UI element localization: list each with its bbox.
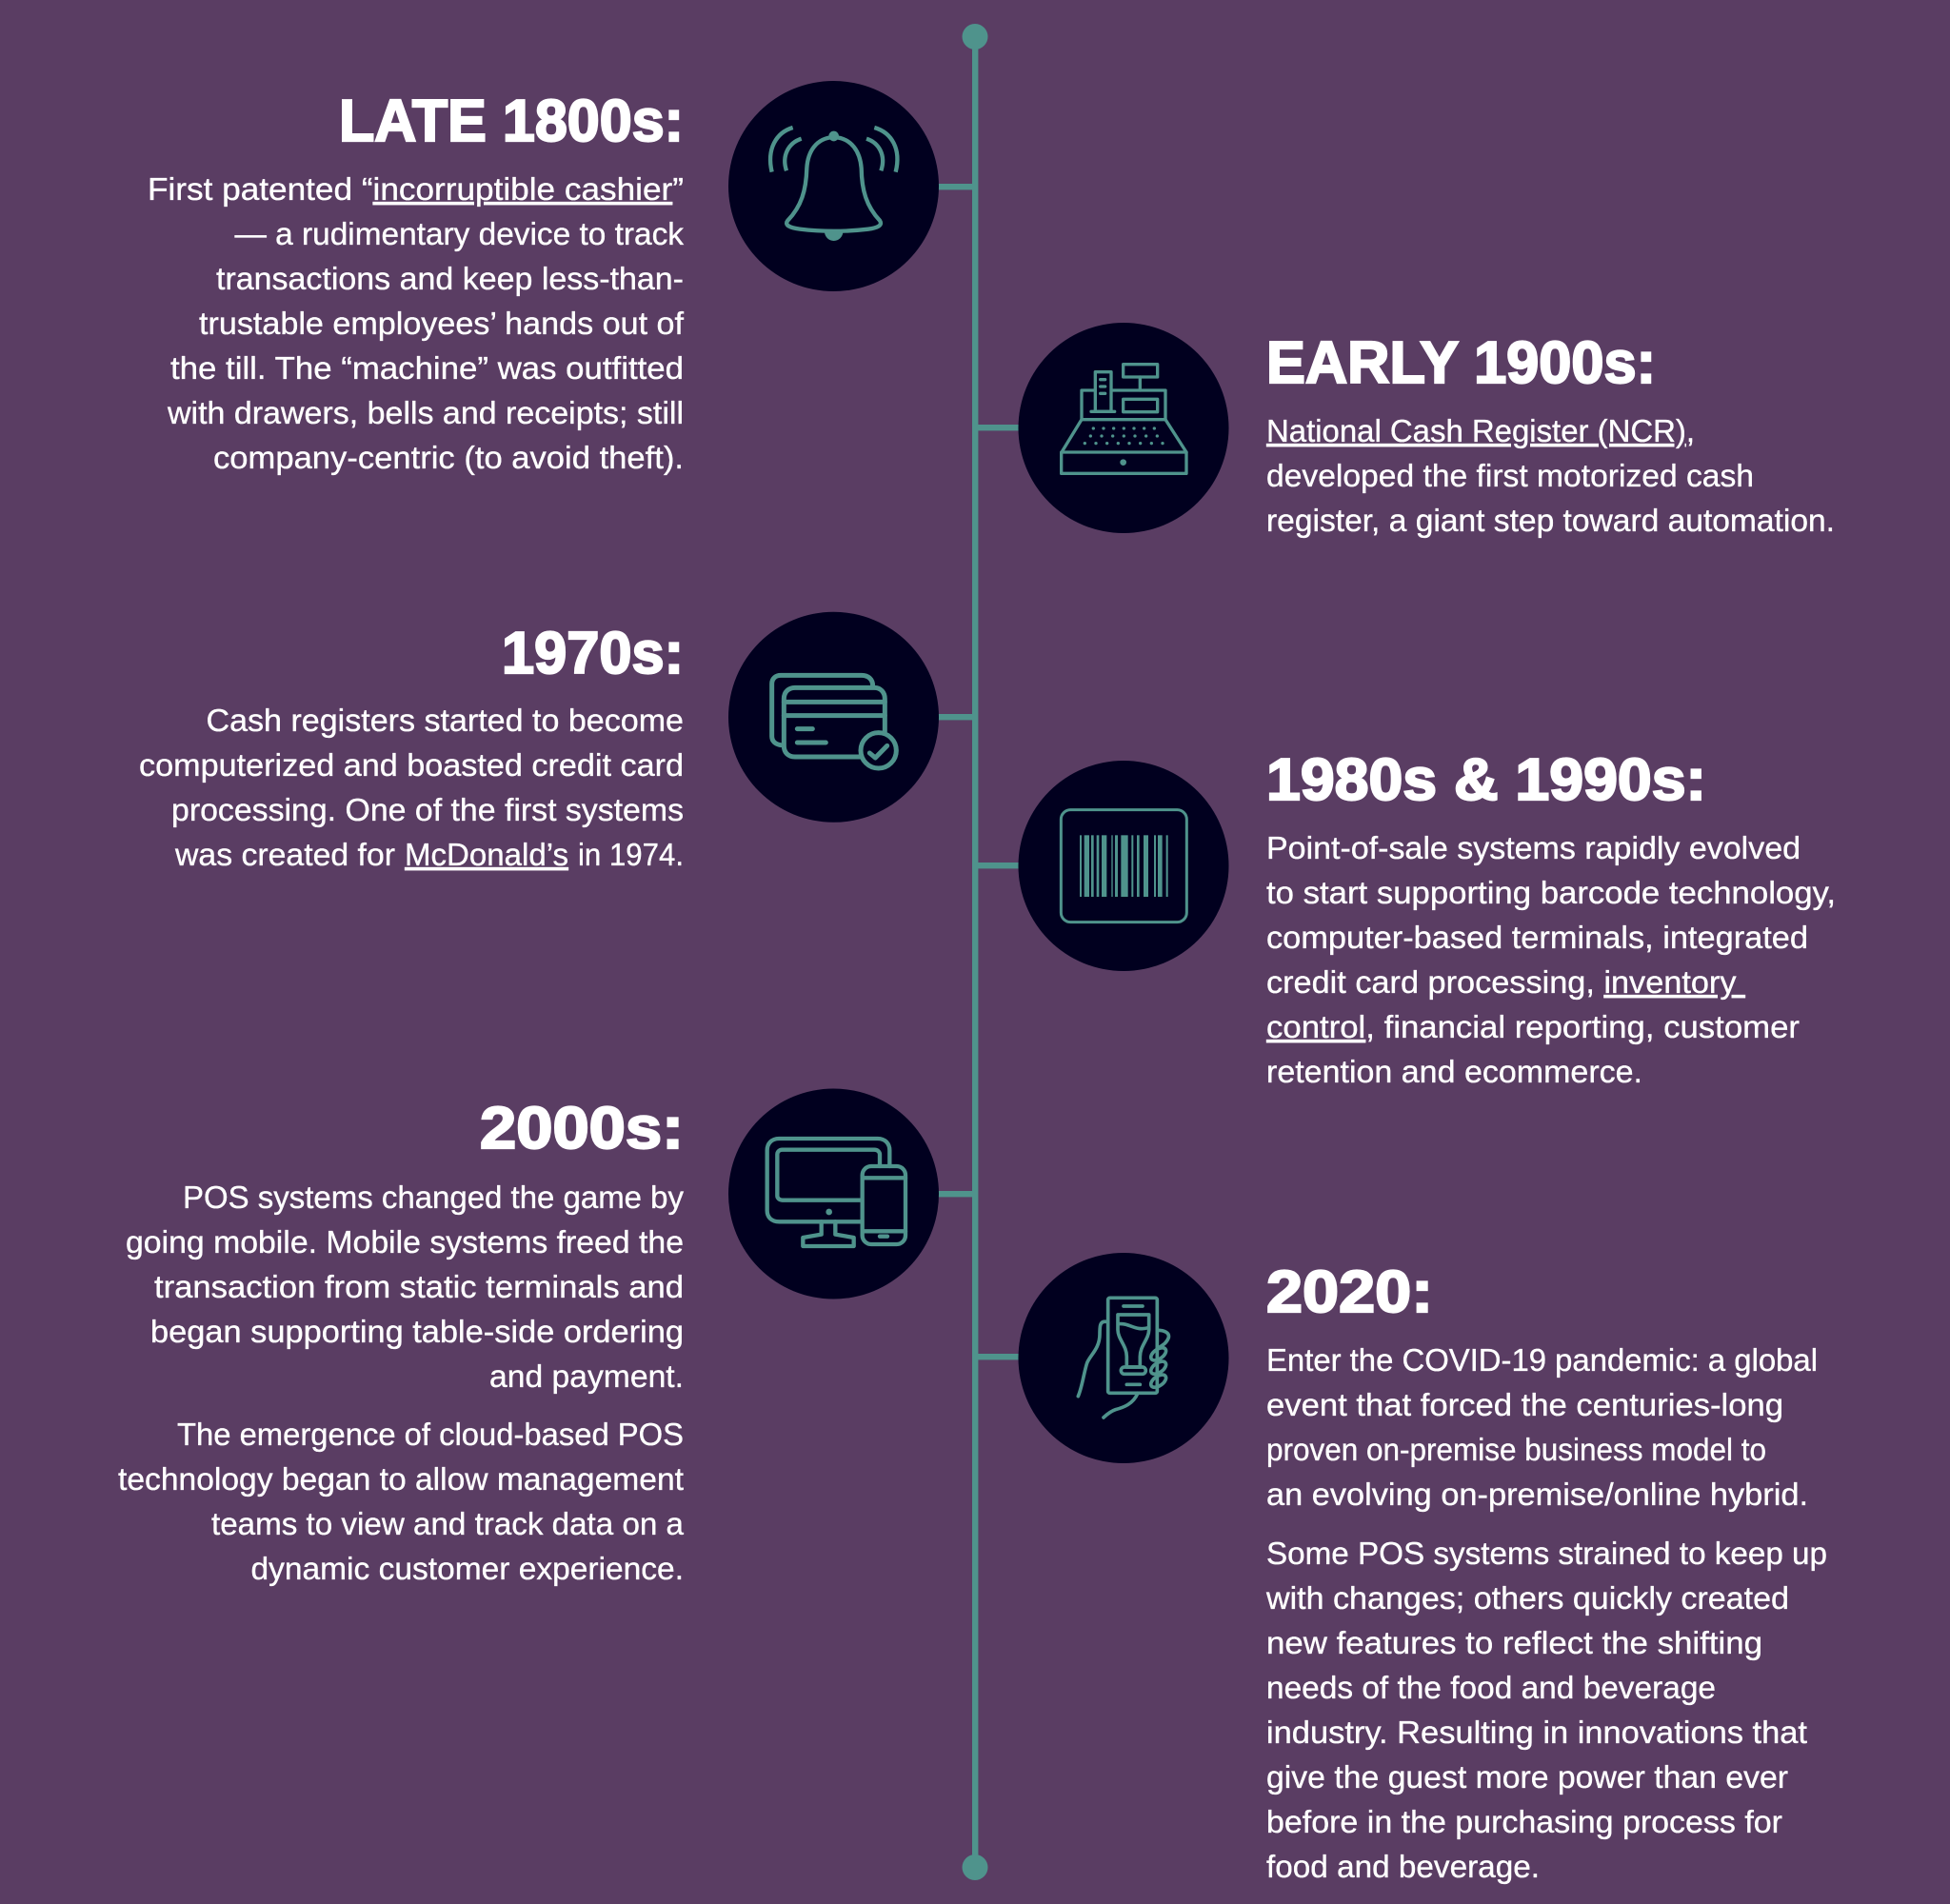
text: 1970s description: Cash registers started to become — [206, 703, 684, 738]
timeline spine — [962, 24, 988, 1880]
heading: 1970s: 1970s: — [502, 621, 684, 686]
text: 2000s description: dynamic customer experience. — [251, 1551, 684, 1586]
text: late 1800s description: with drawers, bells and receipts; still — [167, 395, 684, 430]
text: 1970s description: was created for — [174, 837, 395, 872]
text: 2000s description — [118, 1180, 685, 1586]
text: 1980s and 1990s description: to start supporting barcode technology, — [1266, 875, 1836, 910]
text: 1980s and 1990s description: credit card processing, inventory — [1266, 964, 1745, 1000]
heading: 2000s: 2000s: — [480, 1096, 684, 1161]
text: late 1800s description — [148, 171, 685, 475]
text: late 1800s description: First patented “ incorruptible cashier ” — [148, 171, 684, 207]
text: early 1900s description — [1266, 413, 1835, 538]
panel: 2000s — [118, 1096, 685, 1586]
text: 2020 description: an evolving on-premise/online hybrid. — [1266, 1477, 1808, 1512]
text: 2000s description: going mobile. Mobile systems freed the — [126, 1224, 684, 1259]
panel: late 1800s — [148, 89, 685, 475]
text: 2020 description: with changes; others quickly created — [1265, 1580, 1789, 1616]
panel: 2020 — [1265, 1259, 1827, 1884]
icon: bell — [728, 81, 939, 291]
text: 2020 description — [1265, 1342, 1827, 1884]
icon: barcode — [1019, 761, 1228, 971]
text: 2020 description: before in the purchasing process for — [1266, 1804, 1782, 1839]
text: 2000s description: POS systems changed the game by — [183, 1180, 684, 1215]
icon: cash register — [1019, 323, 1228, 533]
text: 1970s description: computerized and boasted credit card — [139, 747, 684, 783]
text: 2020 description: industry. Resulting in innovations that — [1266, 1715, 1807, 1750]
text: 2000s description: teams to view and track data on a — [211, 1506, 685, 1541]
panel: 1980s and 1990s — [1266, 747, 1836, 1089]
icon: credit cards — [728, 612, 939, 823]
connectors — [938, 184, 1021, 1359]
icon: hand holding phone with beer — [1019, 1253, 1228, 1463]
text: 1970s description: in 1974. — [578, 837, 684, 872]
text: 2000s description: The emergence of cloud-based POS — [177, 1417, 684, 1452]
text: late 1800s description: the till. The “machine” was outfitted — [170, 350, 684, 386]
heading: early 1900s: EARLY 1900s: — [1266, 330, 1656, 396]
panel: 1970s — [139, 621, 684, 872]
text: 2020 description: Enter the COVID-19 pandemic: a global — [1266, 1342, 1818, 1378]
heading: late 1800s: LATE 1800s: — [339, 89, 684, 154]
text: 1970s description: McDonald’s — [405, 837, 568, 872]
text: late 1800s description: trustable employees’ hands out of — [199, 306, 685, 341]
text: late 1800s description: transactions and keep less-than- — [216, 261, 684, 296]
text: 2000s description: and payment. — [489, 1359, 684, 1394]
heading: 2020: 2020: — [1266, 1259, 1433, 1325]
text: 2020 description: needs of the food and beverage — [1266, 1670, 1716, 1705]
text: 1970s description — [139, 703, 684, 872]
text: 2000s description: transaction from static terminals and — [154, 1269, 684, 1304]
text: early 1900s description: National Cash Register (NCR), — [1266, 413, 1695, 448]
text: 2020 description: event that forced the centuries-long — [1266, 1387, 1783, 1422]
text: 2020 description: give the guest more power than ever — [1266, 1759, 1788, 1795]
text: late 1800s description: — a rudimentary device to track — [234, 216, 684, 251]
text: early 1900s description: developed the first motorized cash — [1266, 458, 1754, 493]
text: 1980s and 1990s description — [1266, 830, 1836, 1089]
text: 1980s and 1990s description: control, financial reporting, customer — [1266, 1009, 1800, 1044]
icon: monitor and phone — [728, 1089, 939, 1299]
text: late 1800s description: company-centric (to avoid theft). — [213, 440, 684, 475]
text: 2020 description: new features to reflect the shifting — [1266, 1625, 1762, 1660]
text: 2020 description: food and beverage. — [1266, 1849, 1540, 1884]
text: 2000s description: technology began to allow management — [118, 1461, 684, 1497]
panel: early 1900s — [1266, 330, 1835, 538]
text: early 1900s description: register, a giant step toward automation. — [1266, 503, 1835, 538]
text: 1980s and 1990s description: Point-of-sale systems rapidly evolved — [1266, 830, 1801, 865]
text: 1980s and 1990s description: retention and ecommerce. — [1266, 1054, 1642, 1089]
text: 2020 description: proven on-premise business model to — [1266, 1432, 1766, 1467]
text: 2000s description: began supporting table-side ordering — [150, 1314, 684, 1349]
text: 1980s and 1990s description: computer-based terminals, integrated — [1266, 920, 1808, 955]
heading: 1980s and 1990s: 1980s & 1990s: — [1266, 747, 1706, 813]
text: 1970s description: processing. One of the first systems — [171, 792, 684, 827]
text: 2020 description: Some POS systems strained to keep up — [1266, 1536, 1827, 1571]
